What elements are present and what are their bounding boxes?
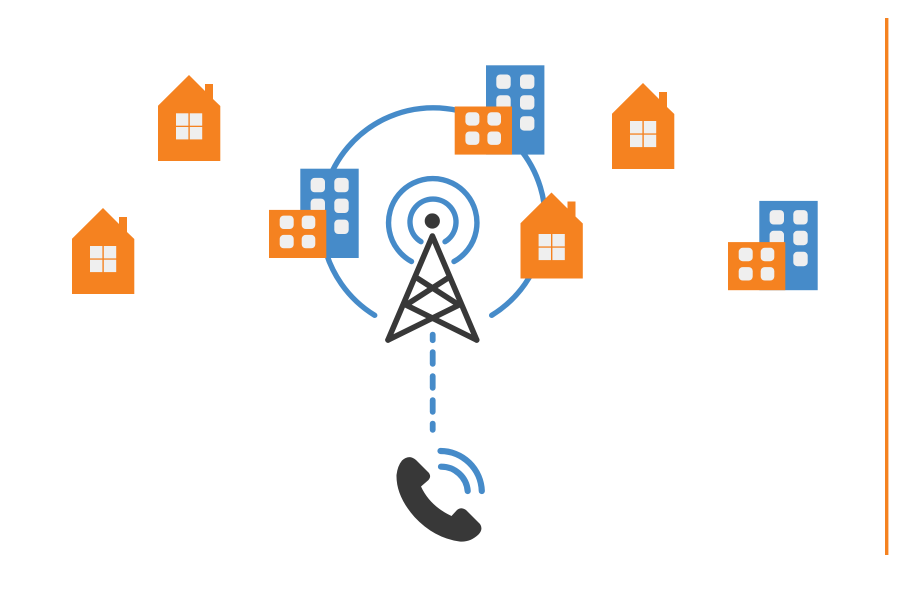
icon: tower [388, 213, 477, 340]
icon: house far left [72, 208, 134, 294]
icon: house top right [612, 83, 674, 169]
icon: buildings on circle left [269, 169, 359, 258]
coverage circle arc [321, 108, 545, 315]
icon: buildings far right [728, 201, 818, 290]
icon: broadcast signal rings [389, 179, 477, 262]
icon: buildings on circle top [455, 65, 544, 155]
icon: house on circle right [520, 192, 583, 278]
vertical orange rule [885, 18, 888, 555]
icon: telephone signal waves [440, 451, 482, 491]
icon: house top left [158, 75, 220, 161]
dashed connection line [430, 335, 436, 430]
icon: telephone handset [396, 457, 481, 542]
